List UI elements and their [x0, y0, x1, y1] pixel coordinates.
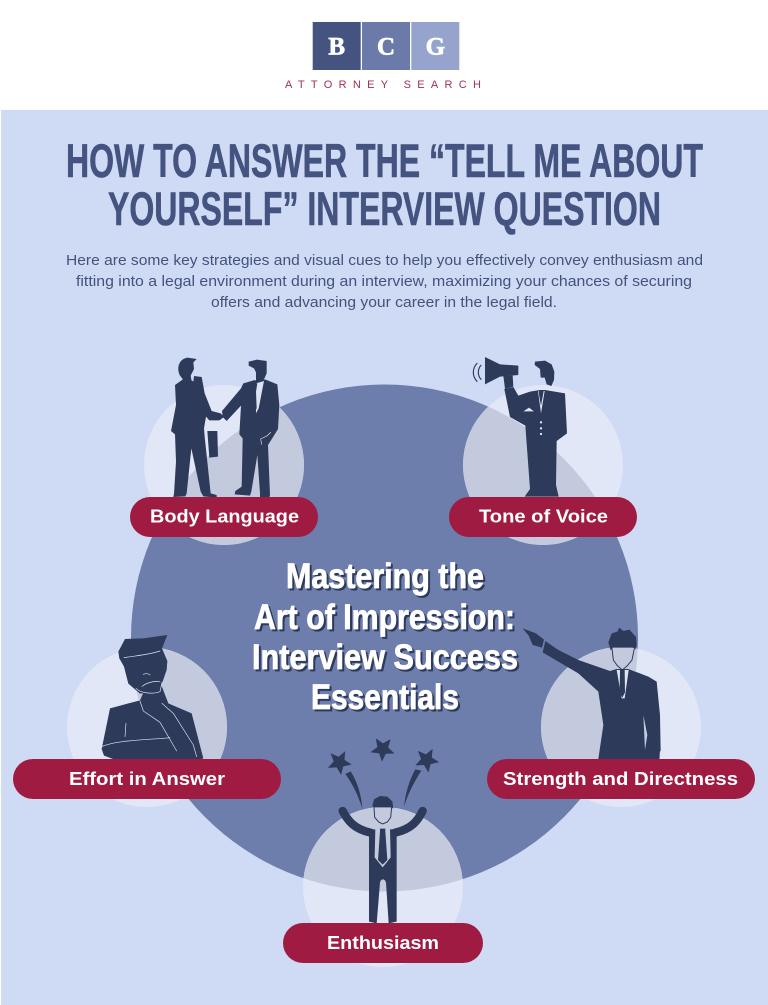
icon: man with megaphone — [473, 357, 567, 497]
logo: ATTORNEY SEARCH — [285, 79, 481, 91]
icon: two men shaking hands — [171, 358, 279, 498]
intro text: fitting into a legal environment during an interview, maximizing your chances of securing — [76, 273, 692, 290]
label: Tone of Voice — [449, 497, 637, 537]
central heading: Mastering the — [288, 559, 486, 598]
label: Effort in Answer — [13, 759, 281, 799]
label: Body Language — [130, 497, 318, 537]
logo — [285, 22, 481, 91]
central circle — [131, 384, 638, 892]
central heading: Interview Success — [252, 638, 518, 677]
central heading: Essentials — [311, 678, 459, 717]
intro text: offers and advancing your career in the legal field. — [211, 294, 557, 311]
intro text: Here are some key strategies and visual cues to help you effectively convey enthusiasm and — [66, 252, 703, 269]
label: Strength and Directness — [487, 759, 755, 799]
central heading: Art of Impression: — [256, 600, 517, 639]
logo: G — [426, 34, 445, 60]
title — [66, 134, 703, 235]
icon: man pointing — [523, 628, 661, 768]
central heading: Mastering the — [286, 557, 484, 596]
label: Body Language: Body Language — [150, 506, 299, 526]
label: Effort in Answer: Effort in Answer — [69, 768, 225, 789]
logo: C — [377, 34, 395, 60]
small circles — [67, 385, 701, 967]
label: Enthusiasm — [283, 923, 483, 963]
central heading: Art of Impression: — [254, 598, 515, 637]
logo: B — [328, 34, 345, 60]
icon: enthusiastic man with stars — [326, 738, 440, 923]
label: Enthusiasm: Enthusiasm — [327, 932, 439, 953]
icon: thinking man — [102, 635, 203, 762]
label: Strength and Directness: Strength and Directness — [503, 768, 738, 789]
central heading: Interview Success — [254, 640, 520, 679]
intro text — [66, 252, 703, 311]
label: Tone of Voice: Tone of Voice — [479, 506, 608, 526]
central heading: Essentials — [313, 680, 461, 719]
central heading — [252, 557, 520, 719]
